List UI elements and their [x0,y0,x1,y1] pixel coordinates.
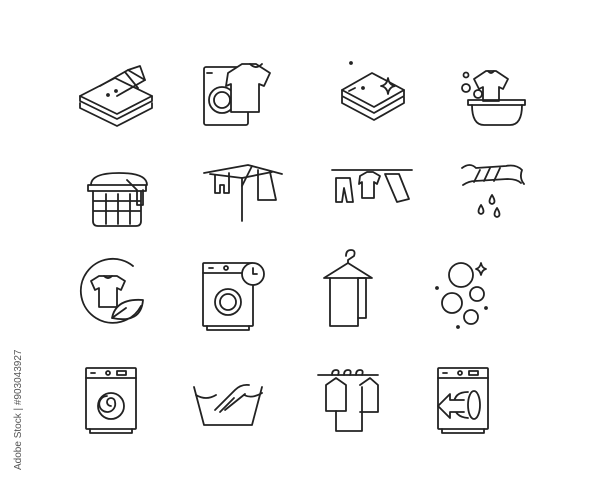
icon: clothesline with clothes [332,170,412,202]
icon: hand wash basin [194,385,262,425]
icon: clothes on hangers [318,370,378,431]
icon: laundry basket [88,173,147,226]
icon: soap bubbles [436,263,487,328]
icon: towel on hanger [324,250,372,326]
icon: towel stack with sparkles [342,62,404,120]
icon: rotary clothes line [204,165,282,221]
icon: washer with timer [203,263,264,330]
watermark text: Adobe Stock | #903043927 [13,350,24,470]
icon: wringing cloth with drops [462,165,524,217]
icon: washer with t-shirt [204,64,270,125]
icon: folded shirts stack [80,66,152,126]
icon: washing machine [86,368,136,433]
icon: eco t-shirt in circle [81,259,143,323]
icon: washer with arrow out [438,368,488,433]
icon: basin with shirt and bubbles [462,71,525,125]
